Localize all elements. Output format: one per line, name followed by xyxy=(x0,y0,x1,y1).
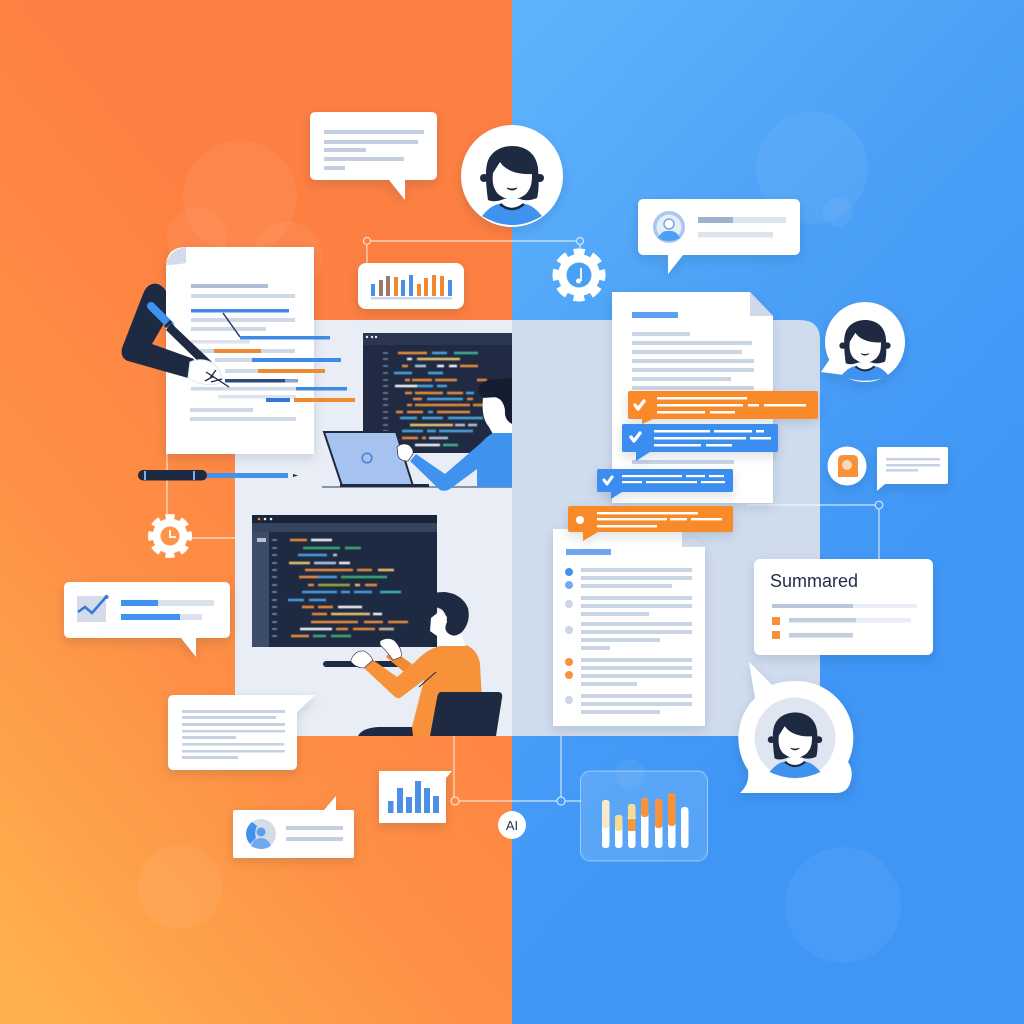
chair back xyxy=(430,692,502,736)
orange badge icon xyxy=(828,446,866,486)
blue sweater xyxy=(410,433,512,491)
report text lines xyxy=(632,332,754,464)
folded corner xyxy=(682,529,705,547)
comment bubble: blue one xyxy=(622,424,778,461)
speech bubble: profile xyxy=(638,199,800,274)
comment bubble: blue two xyxy=(597,469,733,499)
speech bubble: lower text xyxy=(168,695,315,770)
avatar: right woman in bubble xyxy=(821,302,905,382)
manuscript text lines xyxy=(190,284,355,421)
AI badge: AI xyxy=(506,818,518,833)
background: blue right half xyxy=(512,0,1024,1024)
icon: gear with music note xyxy=(556,252,602,298)
summary card xyxy=(754,559,933,655)
list heading xyxy=(566,549,611,555)
speech bubble: trend chart xyxy=(64,582,230,657)
document: lower bullet list xyxy=(553,529,705,726)
neck and face xyxy=(430,610,466,646)
summary rows xyxy=(772,604,917,639)
figure: person with laptop xyxy=(322,378,512,491)
background: orange left half xyxy=(0,0,512,1024)
AI badge xyxy=(498,811,526,839)
speech bubble: people xyxy=(233,796,354,858)
orange sweater xyxy=(364,644,482,736)
connector lines xyxy=(167,238,883,805)
small blue bar chart card xyxy=(379,771,452,823)
stacked bars xyxy=(602,793,688,848)
avatar: top woman xyxy=(461,125,563,227)
folded corner xyxy=(750,292,773,316)
icon: gear with clock xyxy=(150,516,190,556)
document: left manuscript xyxy=(166,247,355,454)
speech bubble: small right xyxy=(877,447,948,491)
code monitor: lower xyxy=(252,515,437,647)
back arm xyxy=(386,650,412,672)
code monitor: upper xyxy=(363,333,512,453)
keyboard xyxy=(323,661,403,667)
comment bubble: orange two xyxy=(568,506,733,541)
glass bar chart card xyxy=(580,771,708,861)
hair xyxy=(426,592,469,636)
document: right report xyxy=(612,292,773,503)
code lines xyxy=(272,540,408,636)
bullets xyxy=(565,568,573,704)
chair base xyxy=(358,727,420,736)
decorative translucent circles xyxy=(138,112,901,963)
comment bubble: orange one xyxy=(628,391,818,424)
speech bubble: top text xyxy=(310,112,437,200)
summary title: Summared xyxy=(770,571,858,591)
icon: pen lying flat xyxy=(138,470,298,480)
figure: person at keyboard xyxy=(323,592,502,736)
list text lines xyxy=(581,568,692,714)
head and hair xyxy=(483,396,512,436)
code lines xyxy=(383,353,487,445)
laptop xyxy=(324,432,413,486)
figure: arm writing with pen xyxy=(122,284,229,387)
avatar: bottom woman in bubble xyxy=(738,662,853,793)
mini bar chart card xyxy=(358,263,464,309)
central panel xyxy=(235,320,820,736)
report heading xyxy=(632,312,678,318)
folded corner xyxy=(166,247,186,265)
